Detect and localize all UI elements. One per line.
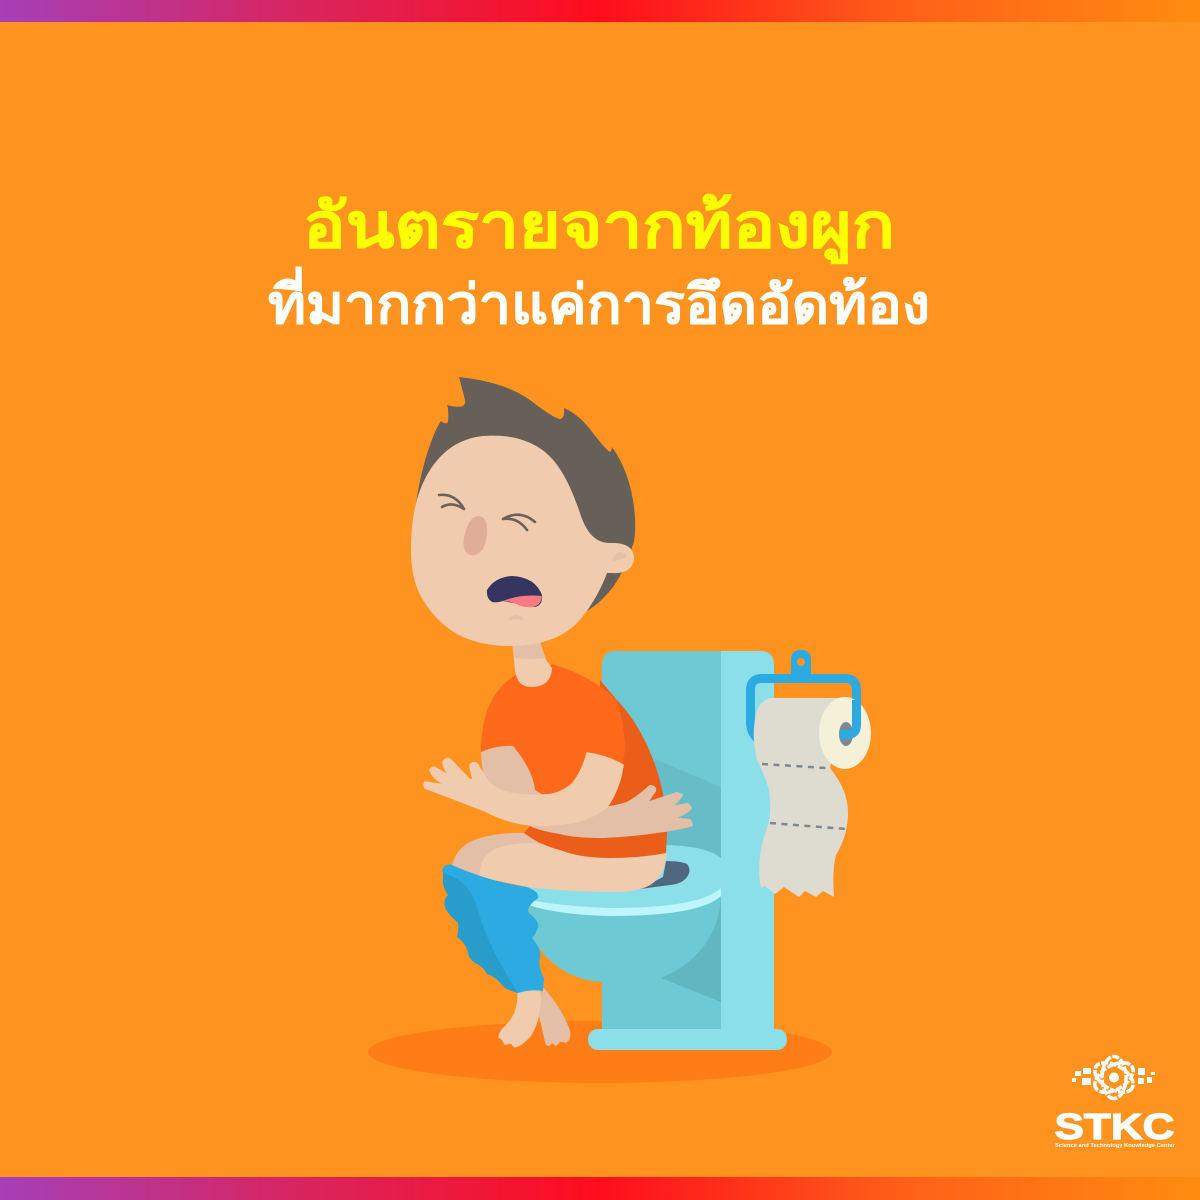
roll core (839, 722, 853, 746)
nose (464, 516, 487, 556)
bowl shadow (661, 900, 721, 1002)
neck (512, 640, 552, 687)
upper arm and hand (424, 753, 623, 825)
roll end (819, 697, 871, 769)
holder tab (791, 650, 811, 676)
title (268, 192, 930, 335)
toilet seat (527, 845, 721, 908)
tank side (721, 651, 774, 1032)
thigh and hip (479, 843, 667, 892)
shirt side shadow (600, 680, 667, 835)
front foot (499, 990, 540, 1047)
mouth (487, 576, 542, 607)
toilet paper sheet (754, 698, 848, 897)
logo nucleus (1109, 1072, 1119, 1082)
neck shadow (512, 640, 546, 659)
pants fold shadow (443, 873, 518, 993)
t-shirt (481, 664, 625, 815)
top gradient bar (0, 0, 1200, 22)
head (411, 436, 634, 646)
lower arm and hand (530, 786, 692, 837)
pants (442, 865, 544, 993)
logo atom (1090, 1056, 1138, 1098)
holder arm front (840, 700, 856, 734)
chin (509, 615, 524, 621)
tongue (503, 596, 542, 607)
paper perforations (762, 764, 846, 829)
hair (416, 377, 635, 612)
ground shadow (368, 1021, 832, 1083)
left eye (439, 495, 464, 509)
right eye (503, 515, 535, 530)
toilet paper holder (750, 678, 856, 738)
seat lip (528, 886, 721, 916)
tank shadow (640, 759, 721, 900)
logo wordmark: STKC (1054, 1106, 1174, 1147)
toilet hole (640, 861, 690, 889)
toilet (527, 651, 787, 1050)
toilet bowl (528, 895, 721, 983)
logo tagline: Science and Technology Knowledge Center (1055, 1143, 1176, 1149)
ear inner (613, 552, 626, 561)
toilet base (588, 1029, 787, 1050)
boy (411, 377, 692, 1047)
toilet tank (602, 651, 721, 1032)
title line 2: ที่มากกว่าแค่การอึดอัดท้อง (268, 266, 930, 335)
shirt lower band (524, 815, 667, 858)
title line 1: อันตรายจากท้องผูก (303, 192, 895, 264)
logo (1054, 1056, 1176, 1149)
thigh back (452, 833, 540, 880)
bottom gradient bar (0, 1177, 1200, 1200)
back foot (539, 988, 570, 1045)
logo squares (1072, 1068, 1155, 1085)
back upper arm (481, 746, 543, 815)
